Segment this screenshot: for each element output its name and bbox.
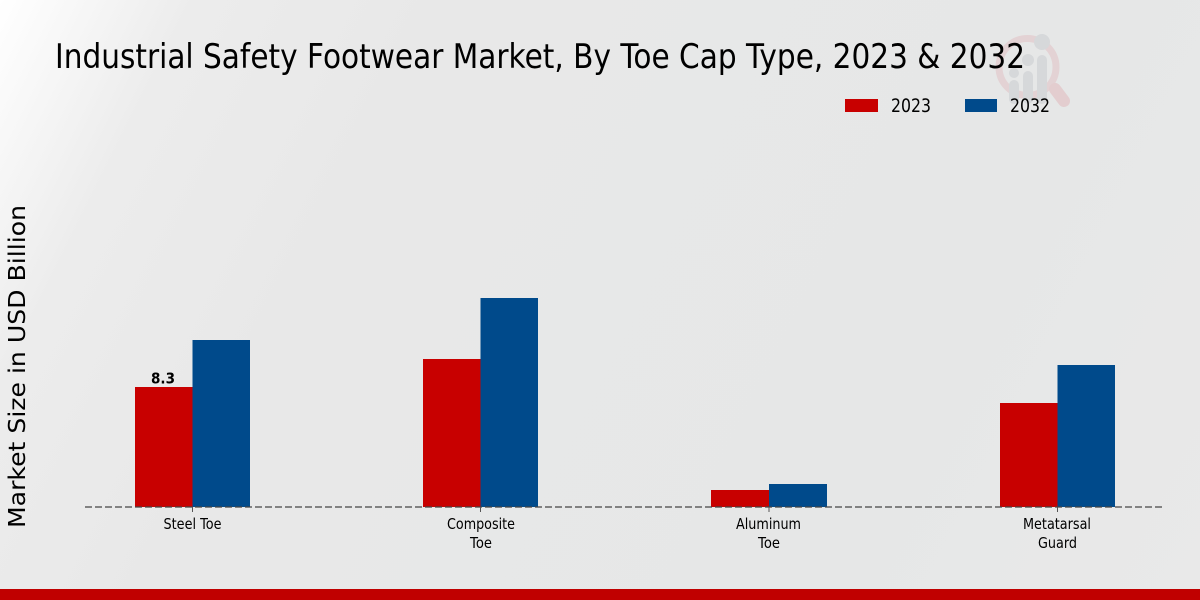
label: Aluminum Toe	[736, 515, 801, 552]
x axis labels	[164, 515, 1091, 552]
label: Aluminum Toe: Aluminum	[736, 515, 801, 533]
group: Aluminum Toe	[711, 484, 827, 507]
y axis label: Market Size in USD Billion	[5, 205, 31, 528]
label: Aluminum Toe: Toe	[757, 534, 780, 552]
legend: 2023	[845, 95, 931, 117]
label: Metatarsal Guard	[1023, 515, 1091, 552]
label: Metatarsal Guard: Metatarsal	[1023, 515, 1091, 533]
label: Composite Toe	[447, 515, 515, 552]
legend: 2032	[965, 95, 1050, 117]
label: Metatarsal Guard: Guard	[1038, 534, 1077, 552]
watermark logo icon	[999, 34, 1064, 104]
legend	[845, 95, 1050, 117]
title: Industrial Safety Footwear Market, By Toe Cap Type, 2023 & 2032	[55, 37, 1025, 77]
label: Steel Toe: Steel Toe	[164, 515, 222, 533]
label: Composite Toe: Composite	[447, 515, 515, 533]
axis baseline	[85, 506, 1165, 508]
bar chart	[85, 298, 1165, 512]
value label: 8.3	[151, 370, 175, 388]
group: Metatarsal Guard	[1000, 365, 1115, 507]
legend: 2023: 2023	[891, 95, 931, 117]
label: Composite Toe: Toe	[469, 534, 492, 552]
footer bar	[0, 589, 1200, 600]
legend: 2032: 2032	[1010, 95, 1050, 117]
group: Composite Toe	[423, 298, 538, 507]
group: Steel Toe	[135, 340, 250, 507]
